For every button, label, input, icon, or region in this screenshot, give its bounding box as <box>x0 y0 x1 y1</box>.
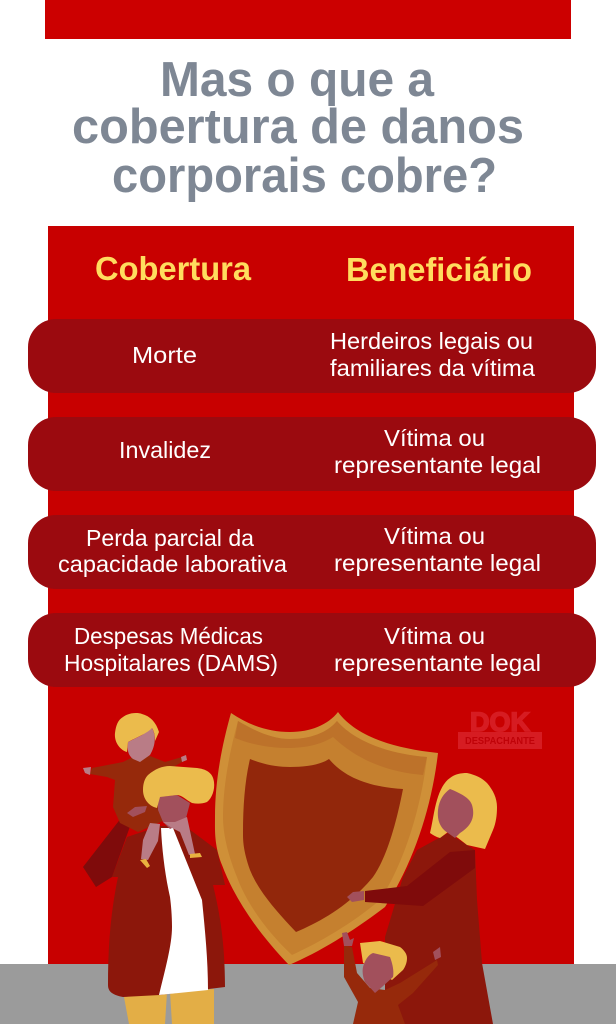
row: Perda parcial: capacidade laborativa <box>58 551 287 577</box>
red panel <box>48 226 574 964</box>
row: Morte: Morte <box>132 342 197 368</box>
shield band <box>223 721 427 955</box>
row: Despesas: Vítima ou <box>384 623 485 649</box>
child legs <box>141 817 195 860</box>
shield core <box>243 759 403 932</box>
icon: child on ground <box>342 932 441 1024</box>
row: Morte: Herdeiros legais ou <box>330 328 533 354</box>
row: Despesas: Hospitalares (DAMS) <box>64 650 278 676</box>
row: Perda parcial: Perda parcial da <box>86 525 254 551</box>
child body <box>90 756 182 832</box>
ground <box>0 964 616 1024</box>
row: Morte: familiares da vítima <box>330 355 535 381</box>
row: Perda parcial: Vítima ou <box>384 523 485 549</box>
icon: woman holding child, left <box>83 713 225 1024</box>
title: Mas o que a <box>160 53 435 107</box>
child head <box>128 728 155 762</box>
child hands <box>83 755 187 775</box>
shield rim <box>215 712 438 965</box>
row: Perda parcial <box>28 515 596 589</box>
top bar <box>45 0 571 39</box>
hands <box>342 932 441 960</box>
legs <box>124 989 214 1024</box>
column heading: Beneficiário: Beneficiário <box>346 251 532 288</box>
white dress <box>159 828 208 995</box>
logo: DOK Despachante: DOK <box>470 707 530 737</box>
child hair <box>115 713 159 752</box>
head <box>363 953 393 993</box>
logo: DOK Despachante: DESPACHANTE <box>465 735 535 747</box>
coat <box>108 826 225 997</box>
mother hand <box>127 806 147 817</box>
row: Despesas: representante legal <box>334 650 541 676</box>
body <box>344 945 438 1024</box>
mother head <box>158 795 190 829</box>
row: Despesas: Despesas Médicas <box>74 623 263 649</box>
row: Morte <box>28 319 596 393</box>
child shoes <box>140 853 202 868</box>
icon: woman on right <box>347 773 497 1024</box>
hand <box>347 891 364 902</box>
row: Despesas <box>28 613 596 687</box>
logo: DOK Despachante <box>458 707 542 749</box>
title: corporais cobre? <box>112 149 497 203</box>
head <box>438 789 473 838</box>
hair <box>360 941 407 980</box>
row: Invalidez: representante legal <box>334 452 541 478</box>
row: Invalidez: Vítima ou <box>384 425 485 451</box>
icon: shield <box>215 712 438 965</box>
title: cobertura de danos <box>72 100 524 154</box>
hair <box>430 773 497 849</box>
sleeve <box>365 850 475 906</box>
title <box>72 53 524 203</box>
row: Invalidez <box>28 417 596 491</box>
dress <box>385 833 493 1024</box>
raised sleeve <box>83 813 133 887</box>
column heading: Cobertura: Cobertura <box>95 250 252 287</box>
mother hair <box>143 766 214 808</box>
row: Perda parcial: representante legal <box>334 550 541 576</box>
shield band shadow <box>235 721 427 775</box>
row: Invalidez: Invalidez <box>119 437 211 463</box>
